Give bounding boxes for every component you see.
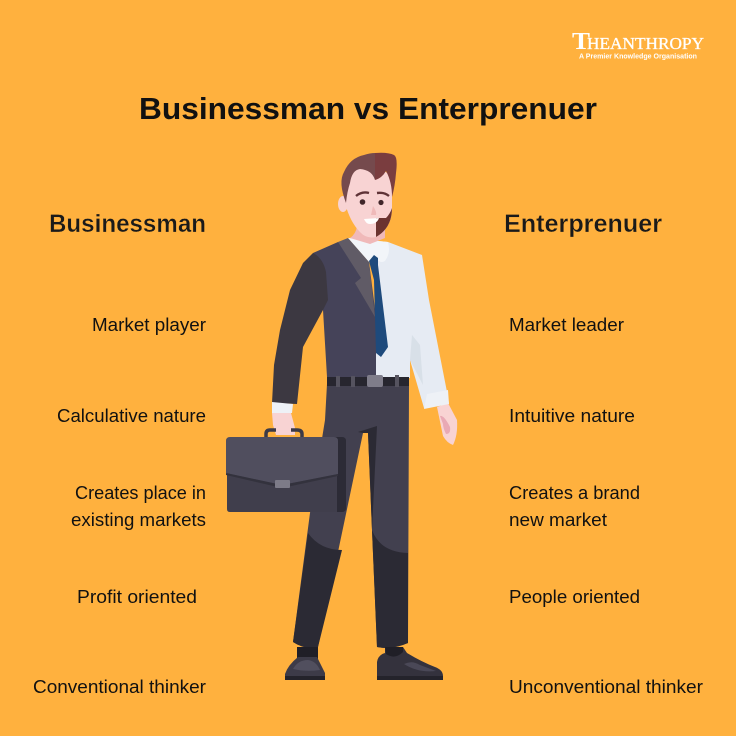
text: Creates a brand new market: new market (509, 509, 607, 530)
smile (364, 218, 379, 224)
text: Market player: Market player (92, 314, 206, 335)
hair (341, 153, 397, 203)
collar (348, 238, 389, 262)
jacket sleeve (272, 253, 328, 404)
logo: Theanthropy: A Premier Knowledge Organisation (579, 54, 697, 60)
necktie (369, 255, 388, 357)
logo: Theanthropy: T (572, 29, 590, 55)
text: Creates a brand new market: Creates a brand (509, 482, 640, 503)
left hand (272, 413, 295, 435)
nose (371, 206, 376, 215)
shirt (348, 238, 449, 408)
heading: Businessman: Businessman (49, 210, 206, 238)
neck (350, 226, 385, 244)
shirt arm shadow (410, 335, 423, 385)
eyebrows (356, 192, 389, 196)
title: Businessman vs Enterprenuer (139, 91, 597, 126)
illustration: half businessman half entrepreneur figure (226, 153, 457, 680)
briefcase (226, 430, 346, 512)
text: Unconventional thinker: Unconventional thinker (509, 676, 703, 697)
jacket lapel (338, 238, 375, 317)
logo: Theanthropy: HEANTHROPY (587, 34, 704, 53)
panel: Businessman column (33, 210, 206, 697)
text: Creates place in existing markets: existing markets (71, 509, 206, 530)
right hand (437, 403, 457, 445)
heading: Enterprenuer: Enterprenuer (504, 210, 662, 238)
text: People oriented: People oriented (509, 586, 640, 607)
logo: Theanthropy (572, 29, 704, 60)
text: Conventional thinker: Conventional thinker (33, 676, 206, 697)
text: Market leader: Market leader (509, 314, 624, 335)
belt (327, 375, 409, 387)
text: Creates place in existing markets (71, 482, 206, 530)
shoes (285, 647, 443, 680)
text: Calculative nature: Calculative nature (57, 405, 206, 426)
ear (338, 196, 348, 212)
right cuff (424, 390, 449, 409)
eyes (360, 199, 384, 205)
text: Creates place in existing markets: Creates place in (75, 482, 206, 503)
beard (376, 208, 392, 237)
left cuff (272, 402, 293, 413)
jacket body (313, 242, 376, 377)
trousers (293, 384, 409, 648)
text: Intuitive nature: Intuitive nature (509, 405, 635, 426)
text: Creates a brand new market (509, 482, 640, 530)
text: Profit oriented: Profit oriented (77, 586, 197, 607)
face (345, 166, 392, 237)
panel: Enterprenuer column (504, 210, 703, 697)
